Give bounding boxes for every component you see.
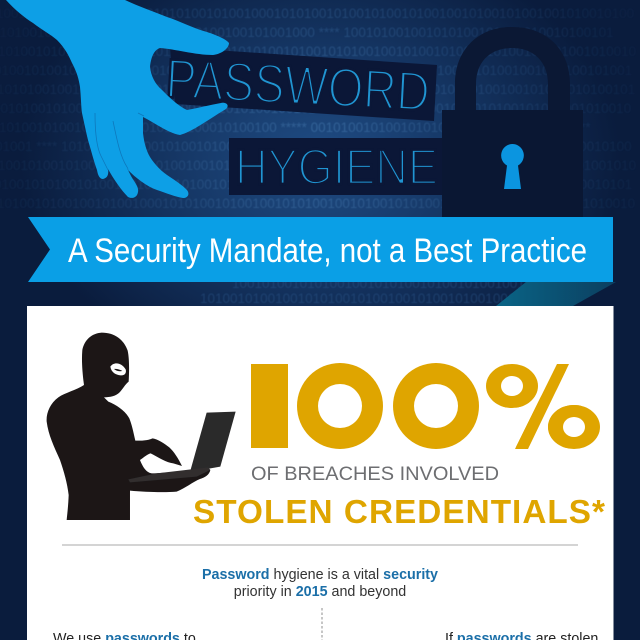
divider bbox=[62, 544, 578, 546]
binary code pattern bbox=[0, 6, 636, 211]
binary code pattern: 0101001001010100101001001010100100101001000 **** 100101001001010100101001010010100101 bbox=[0, 25, 614, 40]
hacker eye bbox=[110, 363, 126, 375]
binary code pattern lower bbox=[200, 276, 577, 306]
binary code pattern: 1010010101001001010010100101000101010010100101010010010100101001010100100101001010010 bbox=[0, 44, 636, 59]
subheading: of breaches involved: OF BREACHES INVOLVED bbox=[251, 463, 499, 485]
icon: masked hacker with laptop bbox=[47, 333, 236, 520]
percent slash bbox=[515, 364, 569, 449]
intro text: Password hygiene is a vital security bbox=[202, 567, 438, 583]
laptop screen bbox=[190, 412, 236, 472]
binary code pattern: 1001010010100101001010100100101001010100100101001010010100100101001010100101001001010 bbox=[0, 158, 636, 173]
lock body bbox=[442, 110, 583, 218]
icon: keyhole bbox=[501, 144, 524, 189]
binary code pattern: 0100101001010010100100101001010010101001001010100101001001010010101001001010100101001 bbox=[0, 63, 632, 78]
finger creases bbox=[95, 113, 144, 170]
big number: 100%: 0 bbox=[300, 347, 359, 465]
binary code pattern: 01001 **** 1010010100100101001010010100100101010010010100101010010010100101010010010100 bbox=[0, 139, 632, 154]
title: hygiene: HYGIENE bbox=[235, 139, 438, 195]
title banner: password bbox=[170, 47, 437, 121]
white content panel bbox=[27, 306, 614, 640]
binary code pattern lower: 10100101001001010100101001001010010100100101001010 bbox=[200, 291, 575, 306]
binary code pattern lower: 1001010010101001001010100101001010010010100101 bbox=[232, 276, 577, 291]
centre dashed divider bbox=[321, 608, 323, 640]
icon: reaching hand bbox=[6, 0, 229, 198]
padlock bbox=[442, 27, 583, 218]
ribbon banner bbox=[28, 217, 613, 282]
binary code pattern: 1010100100101001010100101001010010010100101010010100100101010010100100101001010100101 bbox=[0, 82, 635, 97]
percent rings bbox=[486, 364, 538, 408]
binary code pattern: 0100101010010100100101001010010101001001010010100101001010010010100101001001010010101 bbox=[0, 177, 632, 192]
binary code pattern: 0010100101001001010100101001001010100100101001010010100101001010010100101001001010010 bbox=[0, 101, 631, 116]
title banner: hygiene bbox=[229, 138, 444, 195]
first zero ring bbox=[297, 363, 383, 449]
lock shackle bbox=[455, 27, 570, 112]
hacker silhouette bbox=[47, 333, 210, 520]
ribbon fold bbox=[496, 282, 616, 306]
title: password: PASSWORD bbox=[164, 47, 431, 123]
big number: 100%: 0 bbox=[396, 347, 455, 465]
intro text: priority in 2015 and beyond bbox=[234, 584, 406, 600]
hacker pupil bbox=[114, 369, 122, 371]
big number: 100%: % bbox=[489, 346, 589, 471]
digit one bar bbox=[251, 364, 288, 448]
intro text bbox=[202, 567, 438, 600]
big number: 100% bbox=[251, 363, 600, 449]
laptop base bbox=[128, 467, 210, 482]
binary code pattern: 1010010100100101001000101010010100100101010010010100101010010010100101000101001010010 bbox=[0, 196, 635, 211]
binary code pattern: 1010010100101001001010100100010100100 ***** 0010100101001010100101001001010100 **** bbox=[0, 120, 591, 135]
subheading: stolen credentials: STOLEN CREDENTIALS* bbox=[193, 494, 605, 531]
binary code pattern: 1001010010100101001001010100101001000101010010100101001010010010100101001001010010100 bbox=[0, 6, 634, 21]
second zero ring bbox=[393, 363, 479, 449]
big number: 100%: 1 bbox=[255, 376, 288, 443]
background glow bbox=[0, 0, 640, 310]
